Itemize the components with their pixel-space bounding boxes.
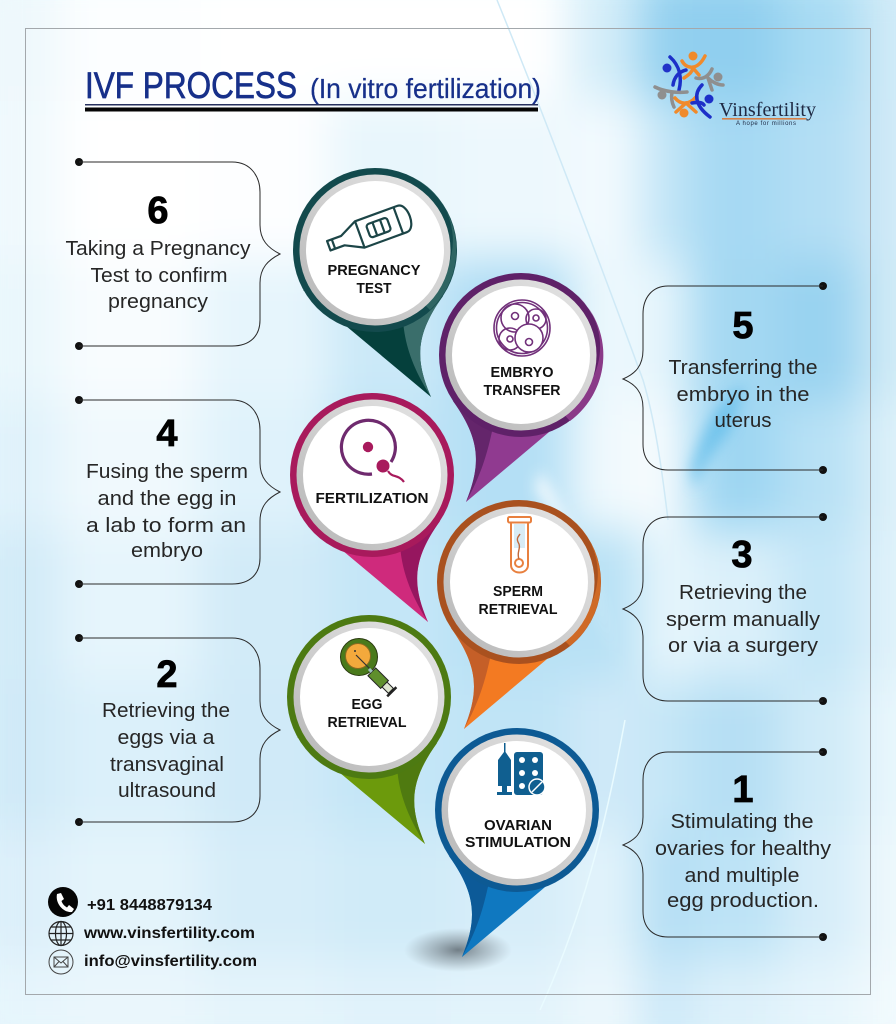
contact: phone <box>48 887 212 917</box>
row 7 <box>0 960 60 1024</box>
contact: phone: +91 8448879134 <box>87 897 212 914</box>
contact: email <box>49 950 257 974</box>
pin: embryo transfer <box>439 273 603 502</box>
step 3 text: sperm manually <box>666 609 820 631</box>
step 4 text: a lab to form an <box>86 515 246 537</box>
label: EGG <box>352 696 382 713</box>
step 2 text: eggs via a <box>118 727 215 749</box>
step 1 text <box>655 769 831 912</box>
bracket: step 3 <box>623 513 827 705</box>
label: FERTILIZATION <box>316 490 428 507</box>
label: TRANSFER <box>484 382 561 399</box>
logo <box>655 52 816 127</box>
step 2 text <box>102 654 230 802</box>
label <box>328 696 406 731</box>
contact: website <box>49 922 255 946</box>
label: EMBRYO <box>490 364 554 381</box>
title <box>85 65 541 112</box>
label: SPERM <box>493 583 543 600</box>
step 1 text: and multiple <box>684 865 800 887</box>
icon: pregnancy test stick <box>324 203 415 259</box>
title: (In vitro fertilization) <box>310 73 541 104</box>
logo: A hope for millions <box>736 121 796 127</box>
title: IVF PROCESS <box>85 65 297 106</box>
step 5 text: 5 <box>732 305 754 347</box>
row 2 <box>0 260 60 400</box>
step 5 text <box>668 305 818 432</box>
step 5 text: uterus <box>714 410 772 432</box>
step 3 text: 3 <box>731 534 753 576</box>
icon: syringe and pills <box>497 743 545 795</box>
step 3 text: or via a surgery <box>668 635 818 657</box>
label <box>484 364 561 399</box>
step 6 text: pregnancy <box>108 291 208 313</box>
pin shadow <box>404 928 512 972</box>
label: STIMULATION <box>465 834 571 851</box>
label: RETRIEVAL <box>478 601 558 618</box>
row 5 <box>0 680 60 830</box>
step 4 text <box>86 413 248 562</box>
pin: fertilization <box>290 393 454 622</box>
step 1 text: Stimulating the <box>670 811 814 833</box>
icon: egg and sperm <box>341 420 404 482</box>
logo: Vinsfertility <box>719 99 816 121</box>
step 2 text: transvaginal <box>110 754 224 776</box>
step 4 text: 4 <box>156 413 178 455</box>
icon: embryo cells <box>494 300 550 356</box>
bracket: step 2 <box>75 634 280 826</box>
logo figures <box>655 52 723 118</box>
label: OVARIAN <box>484 817 552 834</box>
pin: pregnancy test <box>293 168 457 397</box>
step 6 text: Taking a Pregnancy <box>66 238 251 260</box>
row 1 <box>0 100 60 260</box>
pin: sperm retrieval <box>437 500 601 729</box>
pin: egg retrieval <box>287 615 451 844</box>
contact: email: info@vinsfertility.com <box>84 953 257 970</box>
step 6 text <box>66 190 251 313</box>
step 2 text: Retrieving the <box>102 700 230 722</box>
label <box>328 262 420 297</box>
label <box>465 817 571 851</box>
bracket: step 5 <box>623 282 827 474</box>
row 3 <box>0 400 60 530</box>
bracket: step 6 <box>75 158 280 350</box>
bracket: step 1 <box>623 748 827 941</box>
step 5 text: Transferring the <box>668 357 818 379</box>
bracket: step 4 <box>75 396 280 588</box>
step 4 text: and the egg in <box>98 488 236 510</box>
label: RETRIEVAL <box>328 714 406 731</box>
icon: test tube <box>508 517 531 572</box>
row 6 <box>0 830 60 960</box>
contact: website: www.vinsfertility.com <box>83 925 255 942</box>
step 4 text: embryo <box>131 540 203 562</box>
step 6 text: 6 <box>147 190 169 232</box>
label <box>478 583 558 618</box>
step 1 text: ovaries for healthy <box>655 838 831 860</box>
step 3 text: Retrieving the <box>679 582 807 604</box>
step 3 text <box>666 534 820 657</box>
icon: egg and syringe <box>340 638 397 697</box>
step 6 text: Test to confirm <box>90 265 228 287</box>
row 0 <box>0 0 60 100</box>
step 5 text: embryo in the <box>676 384 810 406</box>
label: PREGNANCY <box>328 262 420 279</box>
step 2 text: ultrasound <box>118 780 216 802</box>
pin: ovarian stimulation <box>435 728 599 957</box>
step 4 text: Fusing the sperm <box>86 461 248 483</box>
step 2 text: 2 <box>156 654 178 696</box>
step 1 text: 1 <box>732 769 754 811</box>
row 4 <box>0 530 60 680</box>
label: TEST <box>356 280 392 297</box>
step 1 text: egg production. <box>667 890 819 912</box>
